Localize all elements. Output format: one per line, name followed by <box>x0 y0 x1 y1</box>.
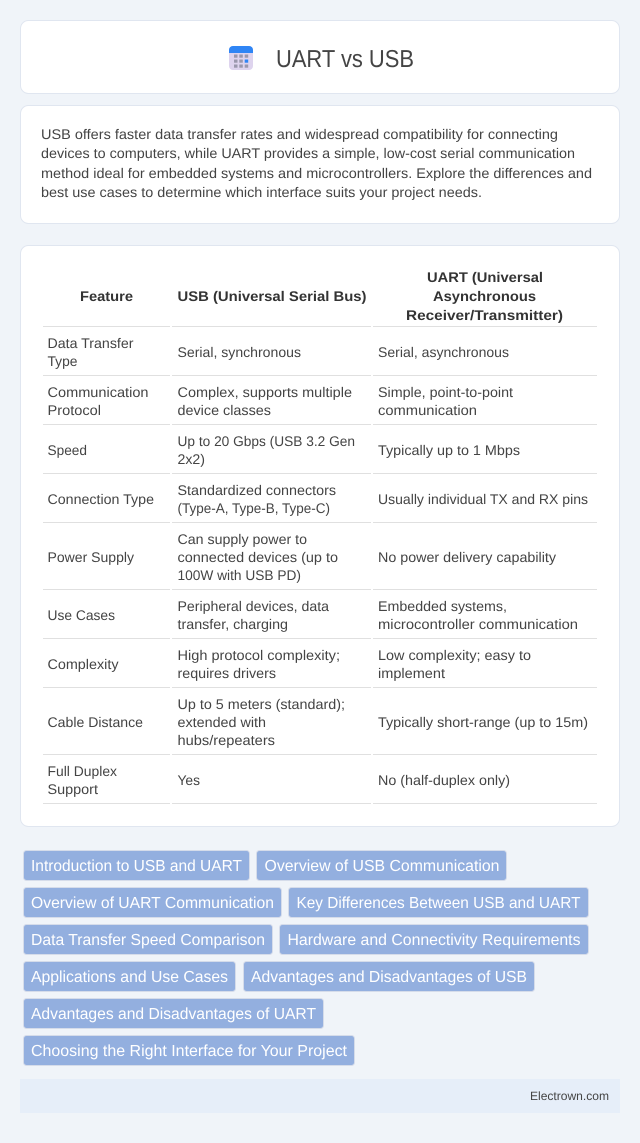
row: power supply: connected devices (up to <box>178 549 338 565</box>
tag: choosing interface: Choosing the Right Interface for Your Project <box>31 1043 348 1060</box>
row: cable distance: Cable Distance <box>48 714 143 730</box>
title: UART vs USB <box>276 46 414 73</box>
tag: introduction <box>24 850 250 880</box>
footer <box>20 1079 620 1113</box>
row: power supply: Power Supply <box>48 549 134 565</box>
row: speed: Typically up to 1 Mbps <box>378 442 520 458</box>
tag: speed comparison: Data Transfer Speed Comparison <box>31 932 265 949</box>
row: data transfer type: Serial, asynchronous <box>378 344 509 360</box>
row: communication protocol: Complex, supports multiple <box>178 384 352 400</box>
row: full duplex support <box>48 763 510 797</box>
header panel <box>20 20 620 94</box>
row: speed <box>48 433 520 467</box>
tag: advantages USB <box>244 962 534 992</box>
row: use cases: Peripheral devices, data <box>178 598 329 614</box>
row: complexity <box>48 647 531 681</box>
row: speed: 2x2) <box>178 451 205 467</box>
row: connection type: Usually individual TX and RX pins <box>378 491 588 507</box>
tag: overview of USB: Overview of USB Communication <box>264 858 500 875</box>
tag: overview of USB <box>256 850 506 880</box>
tag: advantages UART: Advantages and Disadvantages of UART <box>31 1006 316 1023</box>
icon: calendar grid <box>229 46 253 70</box>
row: speed: Up to 20 Gbps (USB 3.2 Gen <box>178 433 355 449</box>
tag: applications <box>24 962 236 992</box>
row: full duplex support: No (half-duplex only) <box>378 772 510 788</box>
row: data transfer type: Serial, synchronous <box>178 344 301 360</box>
row: communication protocol <box>48 384 513 418</box>
tag: choosing interface <box>24 1036 354 1066</box>
row: cable distance: extended with <box>178 714 266 730</box>
table header: UART (Universal <box>427 269 543 285</box>
table header: USB (Universal Serial Bus) <box>178 288 366 304</box>
row: use cases <box>48 598 578 632</box>
intro text: USB offers faster data transfer rates and widespread compatibility for connecting <box>41 126 558 142</box>
row: data transfer type: Data Transfer <box>48 335 134 351</box>
row: cable distance: hubs/repeaters <box>178 732 275 748</box>
tag: overview of UART <box>24 888 282 918</box>
table header: Feature <box>80 288 133 304</box>
footer: Electrown.com <box>530 1089 609 1103</box>
tag: hardware: Hardware and Connectivity Requirements <box>288 932 580 949</box>
row: connection type: Standardized connectors <box>178 482 336 498</box>
row: communication protocol: Protocol <box>48 402 101 418</box>
tag: advantages UART <box>24 998 324 1028</box>
row: full duplex support: Yes <box>178 772 200 788</box>
row: complexity: Low complexity; easy to <box>378 647 531 663</box>
row: use cases: microcontroller communication <box>378 616 578 632</box>
table header <box>80 269 563 323</box>
row: full duplex support: Full Duplex <box>48 763 117 779</box>
tag: key differences: Key Differences Between USB and UART <box>296 895 581 912</box>
row: power supply: Can supply power to <box>178 531 307 547</box>
row: complexity: requires drivers <box>178 665 276 681</box>
tag: introduction: Introduction to USB and UART <box>31 858 242 875</box>
row: connection type: Connection Type <box>48 491 154 507</box>
intro text: best use cases to determine which interface suits your project needs. <box>41 184 482 200</box>
row: communication protocol: Communication <box>48 384 148 400</box>
row: communication protocol: Simple, point-to-point <box>378 384 513 400</box>
row: use cases: transfer, charging <box>178 616 288 632</box>
row: power supply: 100W with USB PD) <box>178 567 301 583</box>
topic tags <box>24 850 588 1066</box>
row: power supply <box>48 531 556 583</box>
row: power supply: No power delivery capability <box>378 549 556 565</box>
row: complexity: High protocol complexity; <box>178 647 340 663</box>
tag: advantages USB: Advantages and Disadvantages of USB <box>251 969 527 986</box>
row: complexity: implement <box>378 665 445 681</box>
intro panel <box>20 106 620 224</box>
intro text: method ideal for embedded systems and microcontrollers. Explore the differences and <box>41 165 592 181</box>
tag: speed comparison <box>24 924 272 954</box>
row: data transfer type: Type <box>48 353 78 369</box>
row: data transfer type <box>48 335 509 369</box>
row: connection type: (Type-A, Type-B, Type-C) <box>178 500 330 516</box>
comparison table panel <box>20 246 620 826</box>
row: cable distance: Typically short-range (up to 15m) <box>378 714 588 730</box>
table header: Asynchronous <box>433 288 536 304</box>
row: connection type <box>48 482 588 516</box>
tag: hardware <box>280 924 588 954</box>
intro text <box>41 126 592 200</box>
table header: Receiver/Transmitter) <box>406 307 563 323</box>
row: cable distance: Up to 5 meters (standard); <box>178 696 345 712</box>
tag: overview of UART: Overview of UART Communication <box>31 895 274 912</box>
row: use cases: Embedded systems, <box>378 598 507 614</box>
row: speed: Speed <box>48 442 87 458</box>
row: full duplex support: Support <box>48 781 98 797</box>
tag: key differences <box>288 888 588 918</box>
row: cable distance <box>48 696 588 748</box>
intro text: devices to computers, while UART provides a simple, low-cost serial communication <box>41 145 575 161</box>
row: use cases: Use Cases <box>48 607 115 623</box>
row: communication protocol: device classes <box>178 402 271 418</box>
tag: applications: Applications and Use Cases <box>31 969 228 986</box>
row: complexity: Complexity <box>48 656 118 672</box>
row: communication protocol: communication <box>378 402 477 418</box>
